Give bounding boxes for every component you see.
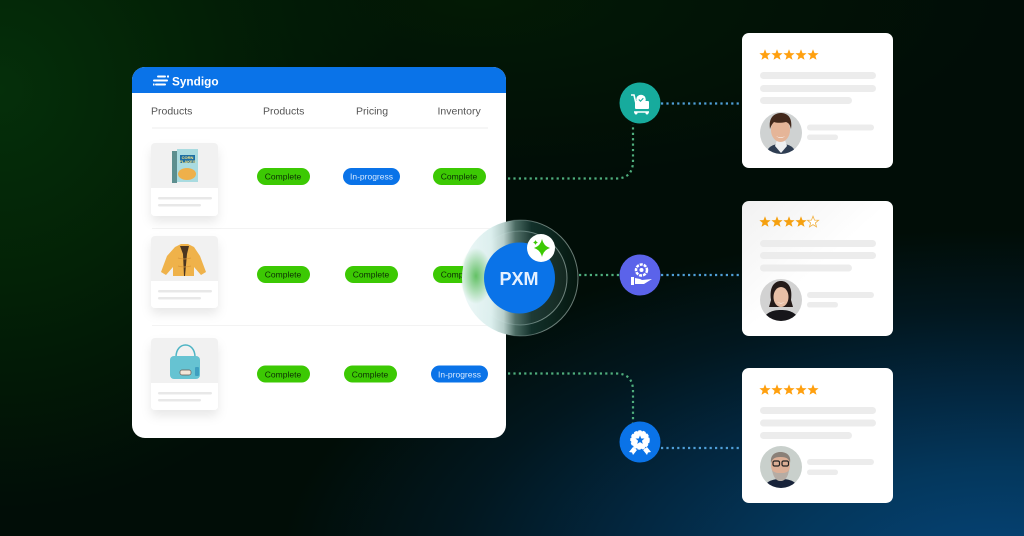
product card: cereal box: [151, 143, 218, 216]
product card: teal bag: [151, 338, 218, 410]
rating: 5 stars: [759, 384, 819, 395]
column headings: Inventory: [438, 106, 481, 118]
table header bar: [132, 67, 506, 93]
avatar: man with glasses: [760, 446, 802, 489]
panel: product table: [132, 67, 506, 438]
status pills: Complete: [353, 270, 389, 280]
status pills: In-progress: [350, 172, 393, 182]
status pills: In-progress: [438, 370, 481, 380]
icon: AI sparkle badge: [527, 234, 555, 262]
PXM hub: PXM: [499, 269, 539, 289]
column headings: Products: [151, 106, 192, 118]
status pills: Complete: [265, 172, 301, 182]
avatar: woman: [760, 279, 802, 322]
product card: cereal box: CORN: [182, 155, 193, 160]
column headings: [151, 106, 481, 118]
status pills: Complete: [352, 370, 388, 380]
review card 3: [742, 368, 893, 503]
status pills: Complete: [265, 270, 301, 280]
column headings: Products: [263, 106, 304, 118]
connectors: icons to review cards: [661, 104, 742, 448]
status pills: Complete: [265, 370, 301, 380]
logo: Syndigo: Syndigo: [172, 74, 219, 88]
status pills: Complete: [441, 270, 477, 280]
icon: hand with flower: [620, 254, 660, 296]
review card 1: [742, 33, 893, 168]
avatar: man: [760, 112, 802, 155]
rating: 5 stars: [759, 49, 819, 60]
icon: shopping cart: [620, 82, 660, 124]
column headings: Pricing: [356, 106, 388, 118]
icon: award badge: [620, 422, 660, 462]
PXM core: [484, 242, 555, 314]
status pills: Complete: [441, 172, 477, 182]
product card: cereal box: FLAKES: [180, 159, 196, 164]
connector: row 3 to award icon: [508, 374, 633, 423]
PXM hub: [460, 220, 578, 336]
connector: row 1 to cart icon: [508, 124, 633, 178]
rating: 4 stars: [759, 216, 819, 227]
review card 2: [742, 201, 893, 336]
product card: yellow jacket: [151, 236, 218, 308]
connector: PXM to care icon: [579, 274, 620, 276]
status pills: [257, 168, 488, 382]
